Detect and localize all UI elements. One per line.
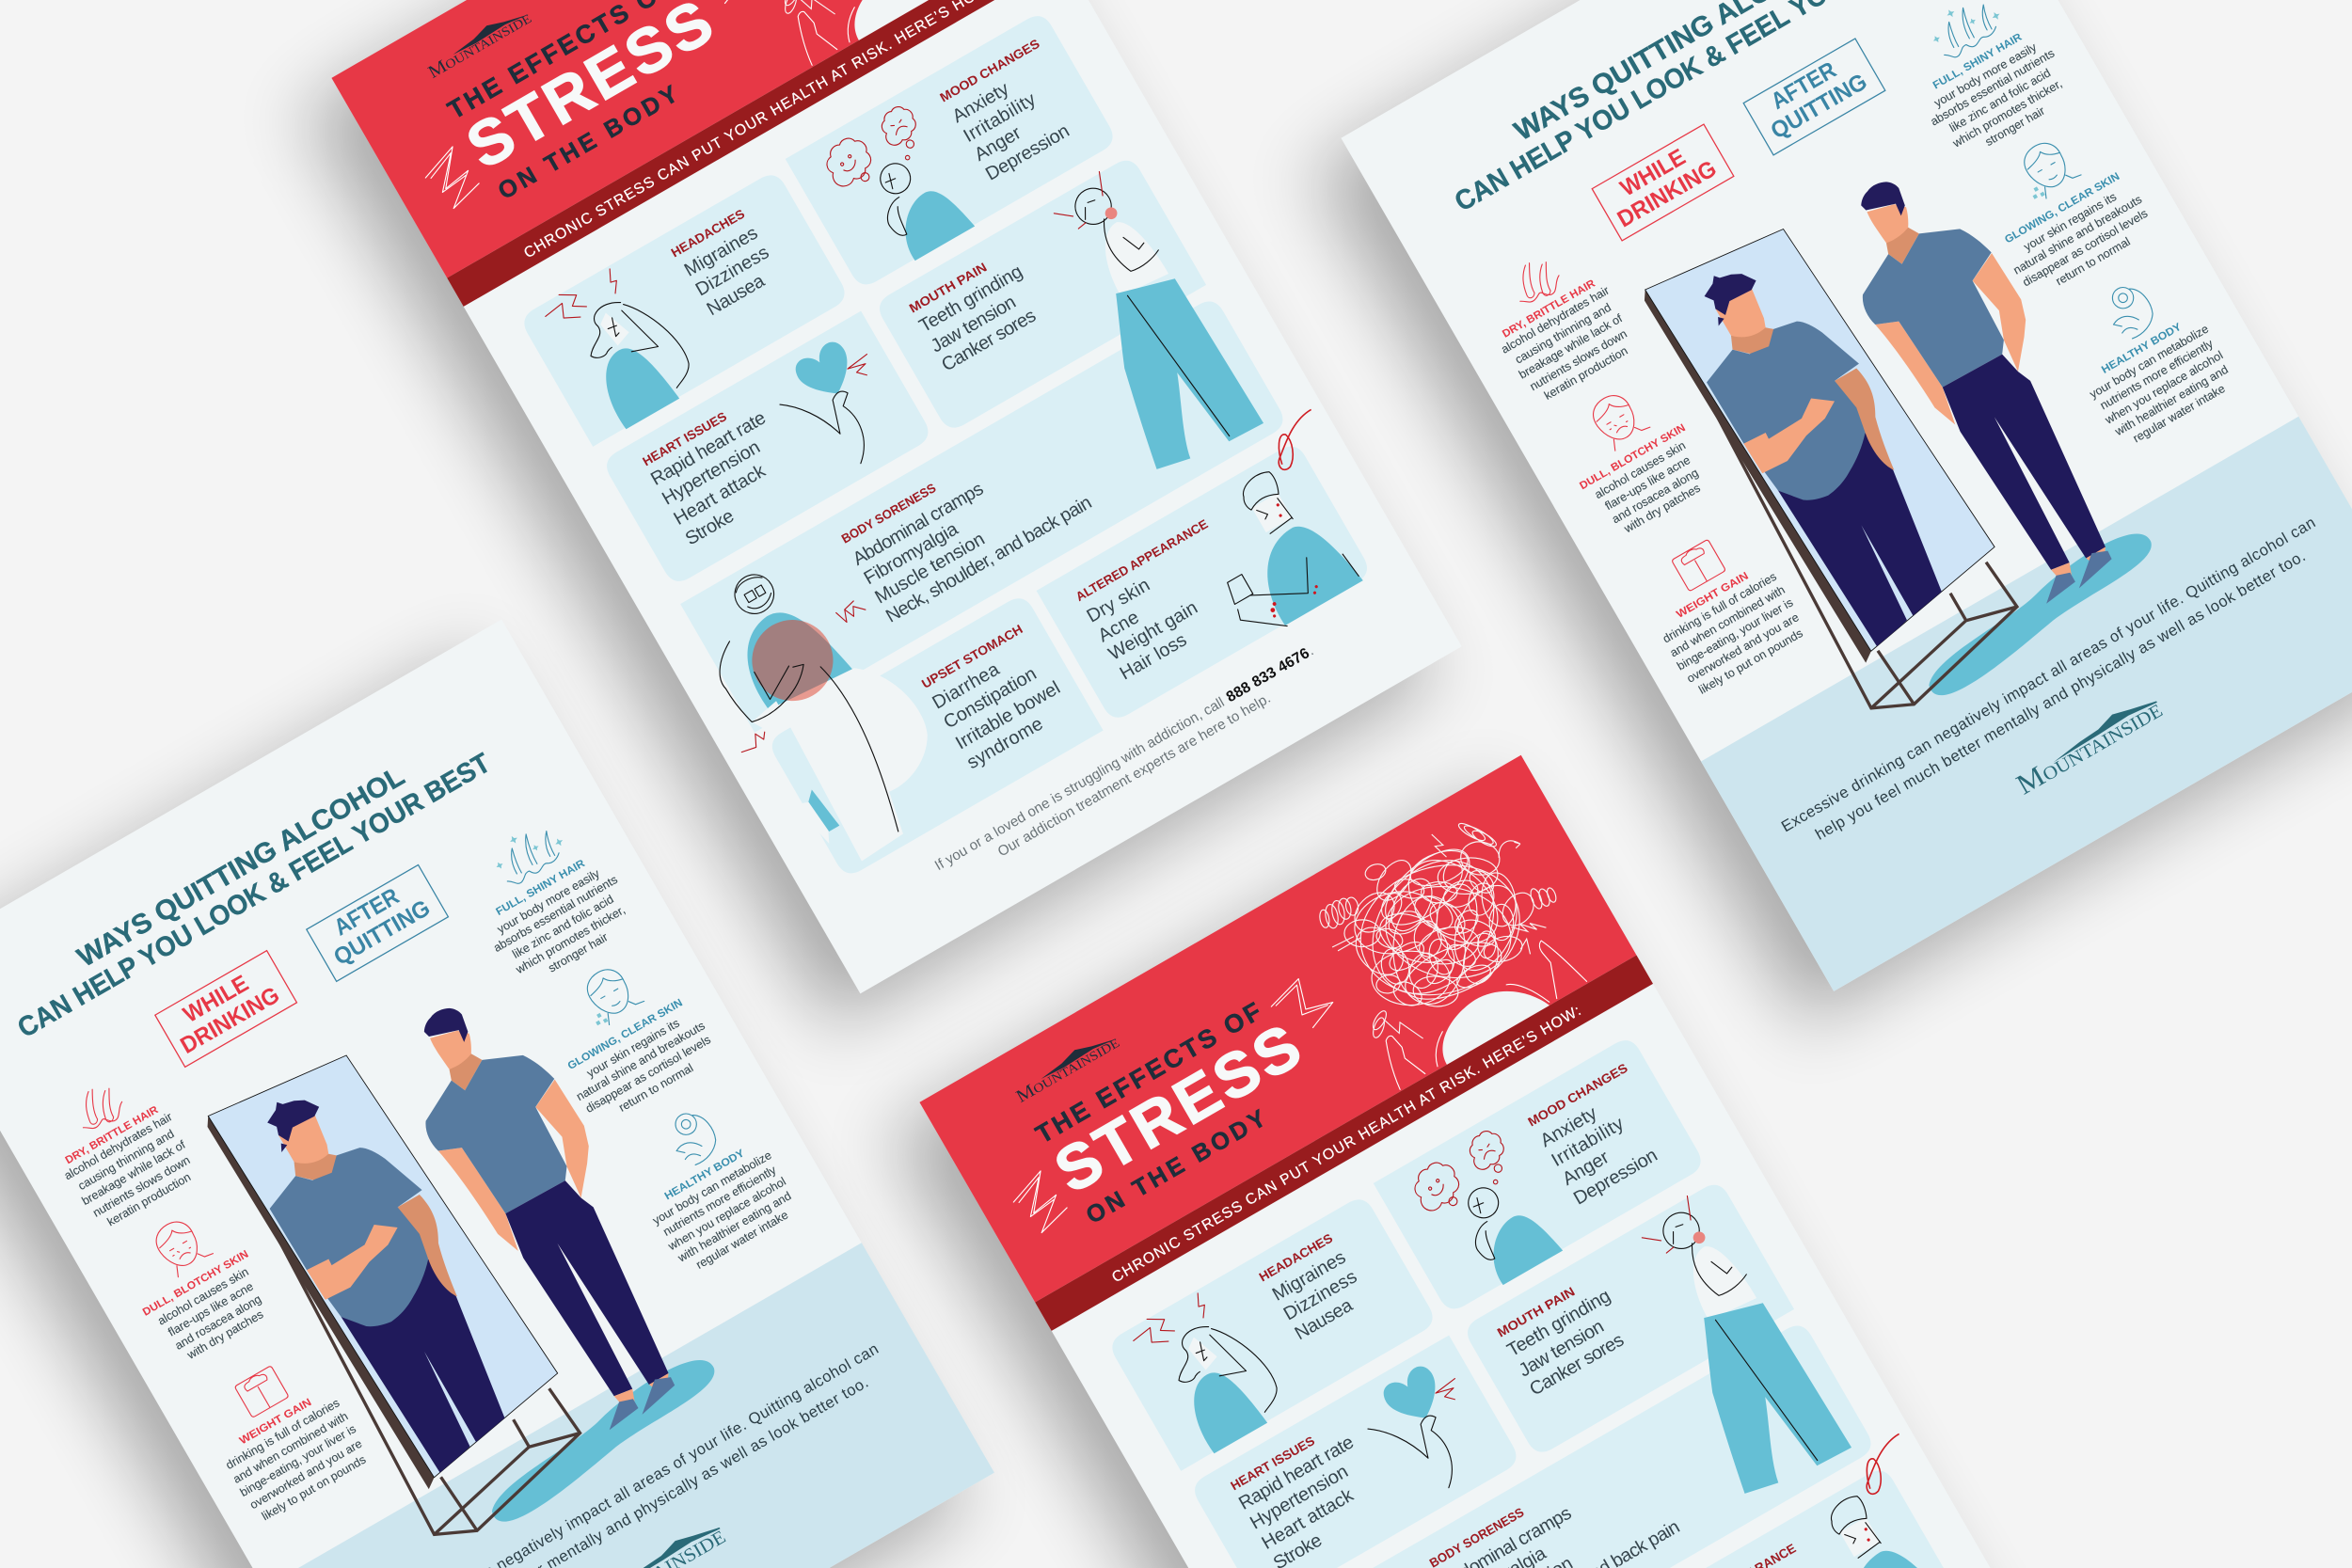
card: altered appearance bbox=[1037, 441, 1373, 723]
illustration: altered appearance figure bbox=[1770, 1480, 1952, 1568]
footer text: Our addiction treatment experts are here to help. bbox=[995, 690, 1273, 860]
text: upset stomach: syndrome bbox=[963, 713, 1046, 773]
mirror with reflection bbox=[1633, 203, 2042, 723]
text: weight gain: overworked and you are bbox=[1685, 610, 1802, 686]
man standing bbox=[376, 976, 723, 1438]
zigzag left bbox=[1007, 1169, 1072, 1237]
text: healthy body: HEALTHY BODY bbox=[663, 1148, 747, 1202]
icon: scale bbox=[234, 1366, 289, 1418]
poster: effects of stress (top) bbox=[331, 0, 1462, 993]
text: mouth pain: Jaw tension bbox=[1516, 1316, 1608, 1381]
logo bbox=[574, 1518, 730, 1568]
text: headaches: Migraines bbox=[681, 223, 761, 281]
text: mood changes bbox=[1526, 1061, 1677, 1210]
text: dry brittle hair: nutrients slows down bbox=[90, 1153, 192, 1220]
scribble head bbox=[708, 0, 998, 36]
title: ON THE BODY bbox=[494, 81, 682, 205]
text: mouth pain bbox=[1495, 1270, 1637, 1400]
text: dry brittle hair: DRY, BRITTLE HAIR bbox=[64, 1104, 161, 1166]
text: full shiny hair: like zinc and folic acid bbox=[1947, 66, 2053, 135]
text: upset stomach: Constipation bbox=[940, 663, 1041, 733]
text: full shiny hair bbox=[1914, 22, 2079, 167]
text: glowing skin bbox=[560, 993, 723, 1130]
icon: dry hair bbox=[69, 1080, 128, 1136]
card: mouth bbox=[1462, 1180, 1794, 1458]
text: mood changes: MOOD CHANGES bbox=[938, 37, 1042, 104]
title: STRESS bbox=[1043, 1011, 1312, 1207]
text: heart issues bbox=[639, 393, 804, 549]
text: mouth pain: Teeth grinding bbox=[915, 261, 1026, 337]
footer text: 888 833 4676 bbox=[1224, 645, 1312, 705]
text: heart issues bbox=[1227, 1418, 1392, 1568]
text: dull blotchy skin bbox=[1578, 422, 1718, 544]
box: while drinking: WHILE bbox=[180, 971, 253, 1028]
icon: full hair bbox=[486, 815, 571, 890]
text: weight gain: and when combined with bbox=[230, 1409, 350, 1486]
zigzag right bbox=[678, 0, 751, 16]
text: weight gain: binge-eating, your liver is bbox=[238, 1422, 358, 1499]
text: glowing skin: GLOWING, CLEAR SKIN bbox=[566, 997, 685, 1072]
box: after quitting bbox=[1743, 39, 1885, 155]
text: body soreness: Neck, shoulder, and back pain bbox=[882, 492, 1095, 627]
card: heart bbox=[601, 311, 933, 587]
title: CAN HELP YOU LOOK & FEEL YOUR BEST bbox=[12, 747, 496, 1044]
text: upset stomach: Irritable bowel bbox=[952, 677, 1064, 753]
text: mouth pain: MOUTH PAIN bbox=[1495, 1284, 1578, 1340]
text: mood changes: Irritability bbox=[1549, 1114, 1628, 1171]
illustration: body soreness figure bbox=[667, 533, 974, 886]
text: mood changes: Depression bbox=[1570, 1145, 1661, 1210]
text: full shiny hair: which promotes thicker, bbox=[513, 903, 628, 977]
card: upset stomach bbox=[767, 593, 1104, 879]
text: heart issues: Rapid heart rate bbox=[647, 407, 770, 490]
text: body soreness: BODY SORENESS bbox=[839, 481, 938, 546]
text: dull blotchy skin: DULL, BLOTCHY SKIN bbox=[1578, 422, 1688, 492]
text: altered appearance: Weight gain bbox=[1105, 597, 1201, 665]
text: glowing skin: natural shine and breakouts bbox=[574, 1019, 707, 1103]
text: full shiny hair: FULL, SHINY HAIR bbox=[494, 858, 588, 918]
logo: MOUNTAINSIDE bbox=[2010, 692, 2168, 800]
box: after quitting bbox=[307, 865, 448, 981]
text: body soreness: Abdominal cramps bbox=[850, 479, 987, 570]
box: while drinking: DRINKING bbox=[177, 982, 284, 1059]
footer text bbox=[932, 643, 1327, 891]
poster: effects of stress (bottom) bbox=[919, 755, 2050, 1568]
text: full shiny hair: your body more easily bbox=[1932, 40, 2040, 110]
text: full shiny hair: stronger hair bbox=[1983, 104, 2047, 149]
text: full shiny hair bbox=[477, 847, 643, 993]
card: headaches bbox=[1106, 1194, 1438, 1471]
text: mood changes: Irritability bbox=[961, 89, 1040, 147]
shadow blob bbox=[1911, 523, 2168, 703]
text: full shiny hair: FULL, SHINY HAIR bbox=[1931, 31, 2025, 91]
text: weight gain: drinking is full of calories bbox=[1661, 570, 1779, 645]
logo: MOUNTAINSIDE bbox=[425, 8, 534, 83]
text: mouth pain: Jaw tension bbox=[928, 292, 1020, 356]
text: healthy body: with healthier eating and bbox=[2112, 363, 2231, 439]
text: mood changes: Anxiety bbox=[1537, 1102, 1600, 1151]
text: dull blotchy skin: and rosacea along bbox=[173, 1292, 263, 1353]
text: dry brittle hair: nutrients slows down bbox=[1528, 327, 1629, 393]
text: glowing skin: return to normal bbox=[616, 1061, 695, 1115]
zigzag left bbox=[419, 145, 484, 213]
text: body soreness bbox=[839, 417, 1095, 627]
card: body soreness bbox=[1268, 1320, 1877, 1568]
card: mouth bbox=[874, 155, 1206, 434]
text: healthy body: with healthier eating and bbox=[675, 1189, 793, 1265]
card: body soreness bbox=[680, 295, 1289, 733]
illustration: headache woman bbox=[1127, 1279, 1291, 1460]
text: headaches: Nausea bbox=[704, 270, 769, 320]
shadow blob bbox=[474, 1350, 731, 1529]
icon: dull skin bbox=[150, 1212, 215, 1278]
text: headaches: HEADACHES bbox=[669, 207, 747, 260]
text: dull blotchy skin: DULL, BLOTCHY SKIN bbox=[141, 1249, 250, 1319]
text: headaches: Dizziness bbox=[1280, 1266, 1360, 1324]
text: dry brittle hair: breakage while lack of bbox=[1517, 311, 1625, 382]
card: mood bbox=[1374, 1035, 1707, 1314]
text: glowing skin bbox=[1996, 167, 2159, 304]
text: dull blotchy skin: with dry patches bbox=[184, 1307, 265, 1362]
text: mouth pain: Teeth grinding bbox=[1503, 1286, 1614, 1361]
text: full shiny hair: your body more easily bbox=[495, 866, 602, 936]
text: altered appearance: Hair loss bbox=[1117, 629, 1190, 684]
text: weight gain: overworked and you are bbox=[247, 1437, 364, 1512]
icon: dry hair bbox=[1506, 253, 1565, 309]
text: glowing skin: your skin regains its bbox=[584, 1017, 682, 1080]
text: mood changes: Anger bbox=[1559, 1147, 1613, 1190]
footer text: . bbox=[1305, 643, 1316, 658]
text: dry brittle hair: alcohol dehydrates hair bbox=[1499, 284, 1612, 356]
box: while drinking: WHILE bbox=[1616, 145, 1690, 201]
text: upset stomach: UPSET STOMACH bbox=[919, 622, 1025, 691]
box: while drinking: DRINKING bbox=[1613, 156, 1721, 232]
text: upset stomach: Diarrhea bbox=[929, 658, 1004, 714]
text: mouth pain: Canker sores bbox=[938, 306, 1040, 375]
floor band bbox=[1701, 417, 2352, 991]
header band bbox=[447, 0, 1065, 307]
text: healthy body: regular water intake bbox=[2131, 382, 2228, 445]
footer text: If you or a loved one is struggling with addiction, call bbox=[932, 694, 1227, 874]
text: dry brittle hair bbox=[1493, 274, 1643, 409]
text: full shiny hair: like zinc and folic acid bbox=[510, 893, 616, 961]
icon: healthy body bbox=[662, 1105, 723, 1170]
text: weight gain bbox=[1653, 558, 1811, 700]
text: mood changes bbox=[938, 37, 1089, 185]
text: healthy body: nutrients more efficiently bbox=[660, 1163, 779, 1239]
text: dull blotchy skin: alcohol causes skin bbox=[155, 1265, 251, 1328]
illustration: headache woman bbox=[539, 255, 703, 436]
illustration: heart bbox=[1353, 1354, 1501, 1508]
icon: dull skin bbox=[1587, 386, 1651, 452]
text: headaches bbox=[669, 206, 784, 322]
text: heart issues: Hypertension bbox=[659, 436, 764, 510]
text: headaches: Migraines bbox=[1269, 1247, 1349, 1306]
text: full shiny hair: absorbs essential nutrients bbox=[491, 873, 620, 955]
title: THE EFFECTS OF bbox=[1030, 996, 1266, 1148]
text: healthy body: when you replace alcohol bbox=[2102, 348, 2225, 427]
card: mood bbox=[786, 10, 1119, 290]
text: altered appearance: ALTERED APPEARANCE bbox=[1073, 516, 1210, 604]
text: healthy body: your body can metabolize bbox=[2088, 323, 2211, 401]
text: mood changes: Anger bbox=[971, 122, 1025, 166]
text: dull blotchy skin: flare-ups like acne bbox=[166, 1279, 256, 1339]
text: body soreness bbox=[1427, 1441, 1683, 1568]
box: after quitting: AFTER bbox=[1767, 57, 1841, 115]
text: altered appearance bbox=[1073, 516, 1257, 684]
floor band bbox=[264, 1243, 994, 1568]
mirror with reflection bbox=[197, 1029, 606, 1550]
text: body soreness: Muscle tension bbox=[871, 529, 989, 608]
illustration: mouth pain figure bbox=[1601, 1188, 1851, 1505]
text: heart issues: Hypertension bbox=[1247, 1461, 1352, 1534]
text: altered appearance: Acne bbox=[1095, 607, 1143, 646]
illustration: mood person bbox=[1406, 1126, 1565, 1300]
text: full shiny hair: stronger hair bbox=[546, 930, 611, 975]
illustration: altered appearance figure bbox=[1182, 455, 1364, 644]
text: heart issues: HEART ISSUES bbox=[1228, 1433, 1317, 1493]
box: after quitting: AFTER bbox=[330, 884, 404, 941]
text: dry brittle hair: breakage while lack of bbox=[80, 1138, 188, 1208]
text: dull blotchy skin bbox=[141, 1249, 280, 1370]
icon: glowing face bbox=[575, 959, 645, 1030]
text: glowing skin: your skin regains its bbox=[2022, 190, 2119, 254]
icon: scale bbox=[1672, 539, 1725, 592]
text: mouth pain: MOUTH PAIN bbox=[907, 260, 990, 316]
illustration: mood person bbox=[818, 102, 977, 276]
text: headaches: HEADACHES bbox=[1257, 1231, 1335, 1284]
text: heart issues: Rapid heart rate bbox=[1235, 1432, 1358, 1514]
icon: healthy body bbox=[2099, 278, 2161, 343]
text: healthy body: when you replace alcohol bbox=[665, 1175, 788, 1254]
text: dull blotchy skin: and rosacea along bbox=[1610, 466, 1701, 526]
text: healthy body: regular water intake bbox=[694, 1208, 790, 1272]
text: body soreness: Fibromyalgia bbox=[861, 518, 962, 589]
header band: CHRONIC STRESS CAN PUT YOUR HEALTH AT RISK. HERE’S HOW: bbox=[1109, 1003, 1583, 1286]
text: dull blotchy skin: with dry patches bbox=[1621, 482, 1703, 536]
box: while drinking bbox=[155, 951, 296, 1067]
red squiggle bbox=[1851, 1433, 1919, 1496]
text: weight gain: WEIGHT GAIN bbox=[1675, 570, 1751, 621]
text: dry brittle hair: keratin production bbox=[1542, 344, 1630, 403]
text: full shiny hair: which promotes thicker, bbox=[1950, 77, 2064, 150]
red squiggle bbox=[1263, 409, 1331, 471]
title: WAYS QUITTING ALCOHOL bbox=[72, 760, 410, 974]
logo: MOUNTAINSIDE bbox=[1013, 1032, 1122, 1107]
header band bbox=[1035, 955, 1653, 1331]
card: headaches bbox=[518, 169, 850, 447]
text: mouth pain: Canker sores bbox=[1526, 1330, 1628, 1400]
box: while drinking bbox=[1592, 124, 1734, 241]
text: glowing skin: natural shine and breakouts bbox=[2011, 193, 2144, 277]
text: weight gain: likely to put on pounds bbox=[1696, 626, 1805, 697]
text: glowing skin: disappear as cortisol levels bbox=[2020, 207, 2150, 289]
text: dull blotchy skin: flare-ups like acne bbox=[1603, 453, 1692, 513]
text: dry brittle hair: alcohol dehydrates hair bbox=[62, 1110, 175, 1182]
text: heart issues: Heart attack bbox=[670, 461, 769, 530]
text: healthy body bbox=[644, 1136, 803, 1279]
text: glowing skin: return to normal bbox=[2054, 235, 2133, 288]
illustration: mouth pain figure bbox=[1013, 164, 1263, 481]
head and hands bbox=[1371, 931, 1588, 1091]
box: after quitting: QUITTING bbox=[329, 895, 435, 971]
text: headaches bbox=[1257, 1230, 1372, 1346]
text: headaches: Nausea bbox=[1292, 1294, 1357, 1344]
text: heart issues: HEART ISSUES bbox=[640, 409, 729, 468]
poster: quitting alcohol (right) bbox=[1341, 0, 2352, 991]
text: dry brittle hair: causing thinning and bbox=[1513, 301, 1613, 367]
text: glowing skin: GLOWING, CLEAR SKIN bbox=[2003, 171, 2122, 245]
man standing bbox=[1813, 150, 2161, 611]
text: headaches: Dizziness bbox=[692, 242, 772, 300]
text: healthy body: HEALTHY BODY bbox=[2100, 321, 2184, 376]
text: mouth pain bbox=[907, 245, 1049, 375]
text: weight gain: binge-eating, your liver is bbox=[1675, 595, 1795, 673]
zigzag right bbox=[1266, 970, 1339, 1040]
icon: full hair bbox=[1924, 0, 2008, 63]
illustration: heart bbox=[765, 329, 913, 483]
text: healthy body bbox=[2080, 310, 2241, 453]
text: weight gain bbox=[215, 1385, 374, 1527]
text: upset stomach bbox=[919, 621, 1075, 773]
text: dry brittle hair: keratin production bbox=[105, 1170, 193, 1228]
footer text: help you feel much better mentally and physically as well as look better too. bbox=[1812, 546, 2309, 844]
text: altered appearance: Dry skin bbox=[1084, 575, 1153, 627]
text: dull blotchy skin: alcohol causes skin bbox=[1593, 438, 1688, 501]
scribble head bbox=[1296, 791, 1586, 1060]
card: altered appearance bbox=[1625, 1465, 1961, 1568]
text: dry brittle hair: causing thinning and bbox=[76, 1127, 177, 1193]
red header bbox=[331, 0, 1048, 278]
text: weight gain: likely to put on pounds bbox=[260, 1453, 368, 1523]
text: dry brittle hair: DRY, BRITTLE HAIR bbox=[1501, 277, 1597, 341]
text: weight gain: WEIGHT GAIN bbox=[238, 1397, 313, 1447]
box: after quitting: QUITTING bbox=[1767, 69, 1871, 144]
title: ON THE BODY bbox=[1082, 1105, 1270, 1229]
text: weight gain: and when combined with bbox=[1668, 583, 1788, 659]
footer text: Excessive drinking can negatively impact all areas of your life. Quitting alcohol can bbox=[1778, 514, 2318, 835]
text: dry brittle hair bbox=[56, 1100, 205, 1236]
text: healthy body: your body can metabolize bbox=[650, 1148, 774, 1227]
card: heart bbox=[1189, 1336, 1521, 1568]
text: healthy body: nutrients more efficiently bbox=[2098, 337, 2216, 412]
head and hands bbox=[783, 0, 1000, 67]
text: mood changes: MOOD CHANGES bbox=[1526, 1061, 1630, 1129]
text: full shiny hair: absorbs essential nutrients bbox=[1929, 47, 2057, 128]
red header bbox=[919, 755, 1636, 1303]
icon: glowing face bbox=[2011, 134, 2083, 204]
text: weight gain: drinking is full of calories bbox=[224, 1396, 342, 1472]
text: glowing skin: disappear as cortisol levels bbox=[583, 1033, 713, 1116]
text: mood changes: Anxiety bbox=[949, 78, 1012, 127]
text: heart issues: Stroke bbox=[682, 505, 738, 549]
poster: quitting alcohol (left) bbox=[0, 619, 994, 1568]
text: mood changes: Depression bbox=[982, 120, 1073, 185]
text: heart issues: Heart attack bbox=[1258, 1485, 1357, 1554]
